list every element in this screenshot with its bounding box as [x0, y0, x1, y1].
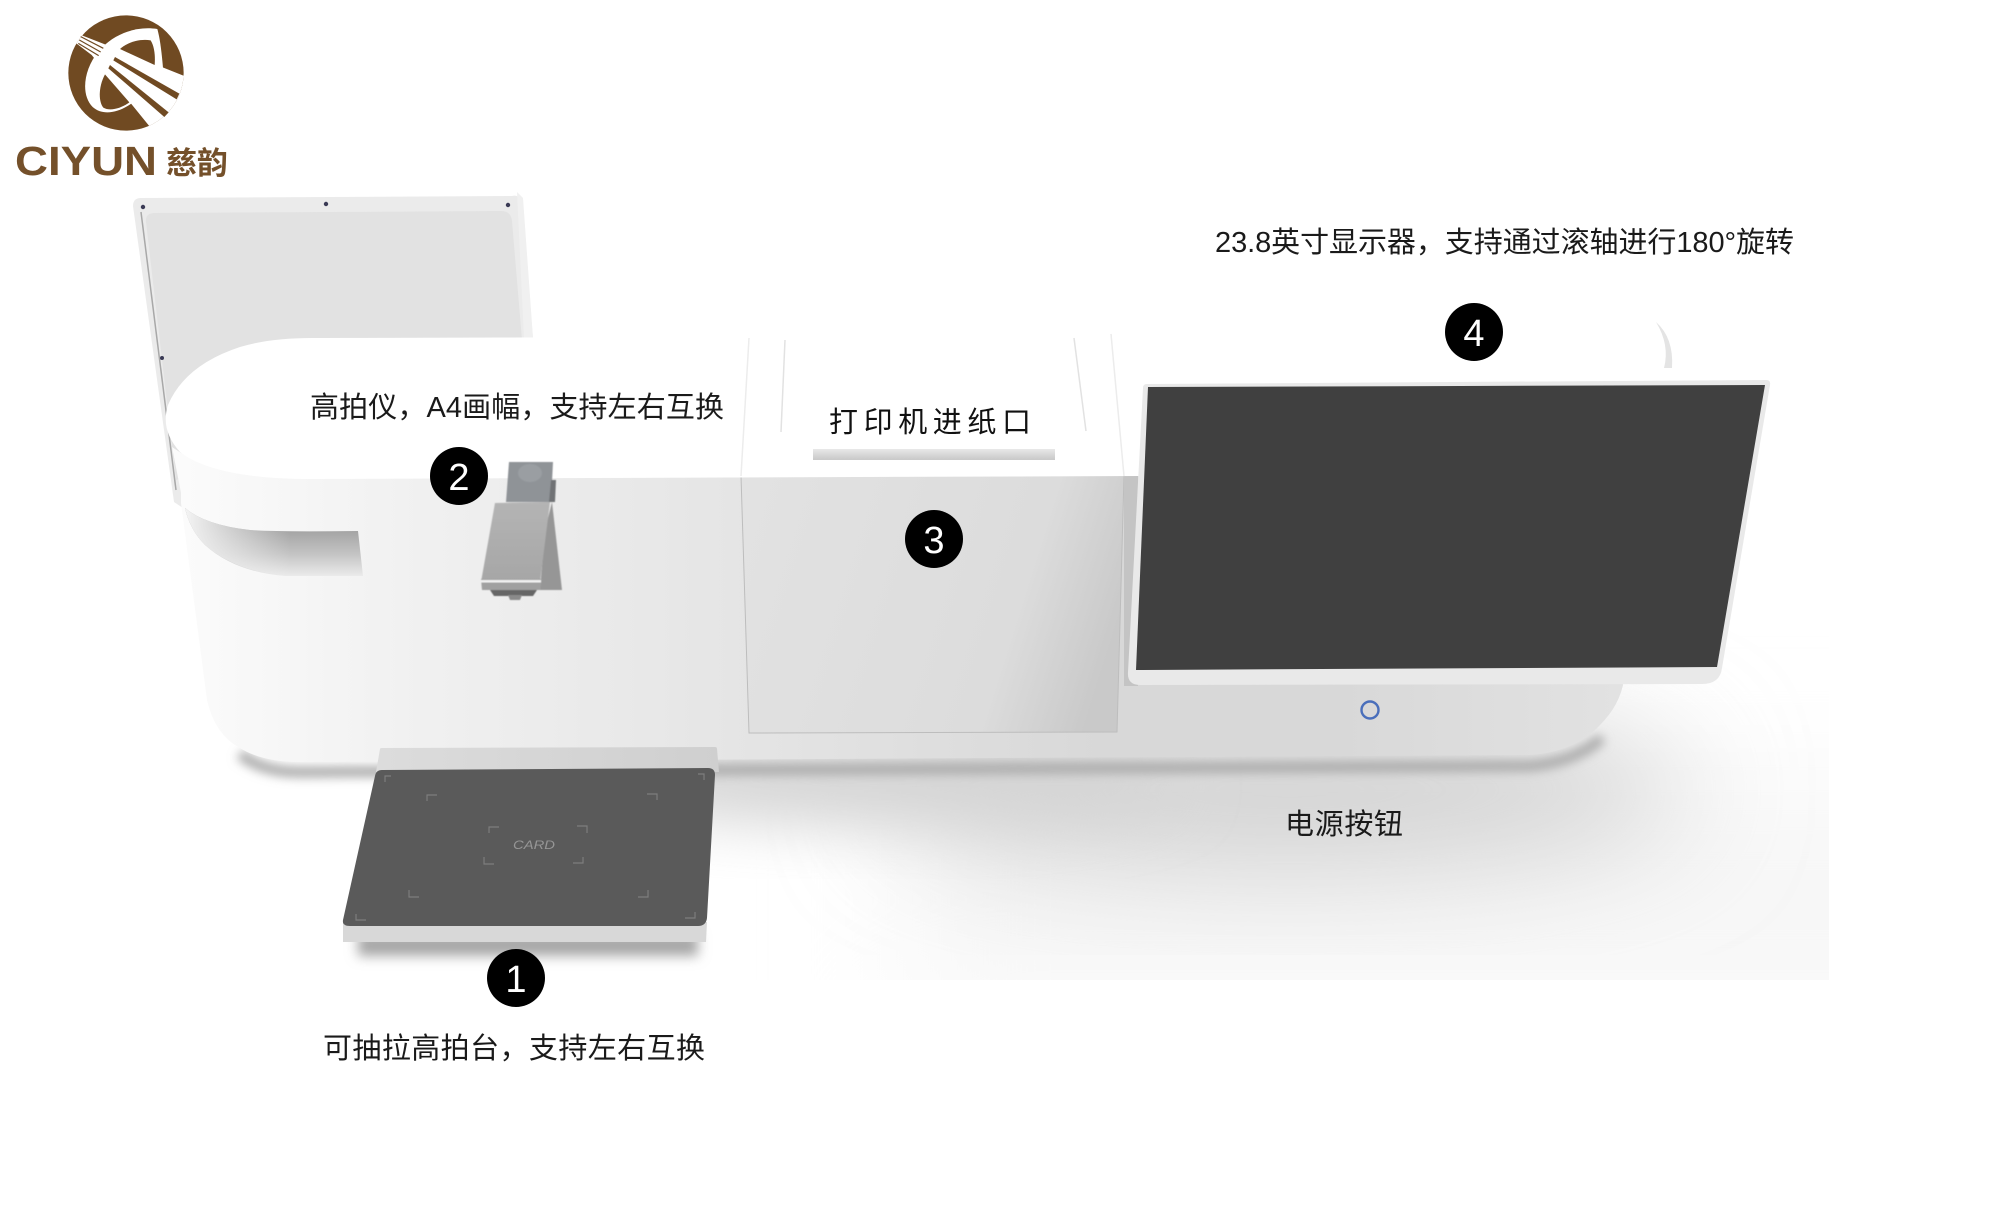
- label: power button: 电源按钮: [1285, 808, 1403, 841]
- camera arm: [481, 502, 550, 582]
- badge 3: [905, 510, 963, 568]
- logo fine rays: [78, 37, 103, 56]
- camera nub: [508, 595, 522, 600]
- side recess: [185, 508, 363, 576]
- camera base: [481, 579, 542, 590]
- logo emblem: [68, 15, 193, 131]
- label: printer slot: 打印机进纸口: [829, 406, 1031, 439]
- printer panel outline: [741, 334, 1124, 733]
- logo wordmark: CIYUN: [15, 138, 157, 184]
- camera head: [506, 462, 553, 502]
- tray dark pad: [343, 768, 715, 926]
- panel frame shadow line: [141, 212, 176, 490]
- right desk corner sliver: [1656, 322, 1672, 368]
- desk body: [172, 334, 1624, 762]
- tray lower strip: [343, 922, 707, 942]
- badge 2: [430, 447, 488, 505]
- logo light wedge: [76, 36, 184, 126]
- under-top rim band: [172, 447, 745, 600]
- tray corner marks: [356, 774, 704, 920]
- badge 1: [487, 949, 545, 1007]
- pull-out tray: [343, 747, 719, 942]
- label: tray: 可抽拉高拍台，支持左右互换: [323, 1032, 705, 1065]
- camera lens: [518, 464, 542, 482]
- desk white top surface: [166, 336, 1140, 479]
- camera foot: [490, 590, 537, 596]
- body front: [181, 476, 1624, 762]
- badge 3: 3: [923, 520, 945, 562]
- camera base highlight: [481, 580, 541, 582]
- logo chinese name: 慈韵: [166, 146, 228, 181]
- logo swoosh: [85, 28, 163, 112]
- printer paper slot: [813, 449, 1055, 460]
- printer top seam lines: [741, 334, 1124, 476]
- tray upper strip: [376, 747, 719, 772]
- monitor bezel: [1128, 380, 1770, 685]
- panel right sliver: [517, 192, 533, 338]
- monitor screen: [1136, 385, 1765, 670]
- panel frame: [133, 196, 533, 508]
- logo lower inner: [100, 74, 129, 109]
- logo beams: [108, 57, 179, 117]
- back panel behind desk: [133, 192, 533, 508]
- camera arm side: [540, 502, 562, 590]
- darker side next to monitor: [1124, 476, 1138, 686]
- printer front panel: [741, 476, 1124, 733]
- badge 4: [1445, 303, 1503, 361]
- high camera: [481, 462, 562, 600]
- tray CARD text: CARD: [513, 840, 555, 852]
- badge 4: 4: [1463, 313, 1485, 355]
- panel screws: [141, 202, 510, 360]
- panel inner face: [146, 211, 522, 480]
- label: monitor: 23.8英寸显示器，支持通过滚轴进行180°旋转: [1215, 226, 1794, 259]
- camera right shade: [549, 480, 556, 502]
- badge 1: 1: [505, 959, 527, 1001]
- logo upper inner: [120, 40, 155, 65]
- monitor: [1128, 380, 1770, 685]
- floor shadow: [234, 694, 1810, 964]
- power button: [1362, 702, 1378, 718]
- badge 2: 2: [448, 457, 470, 499]
- label: document camera: 高拍仪，A4画幅，支持左右互换: [310, 391, 724, 424]
- logo: [15, 15, 228, 184]
